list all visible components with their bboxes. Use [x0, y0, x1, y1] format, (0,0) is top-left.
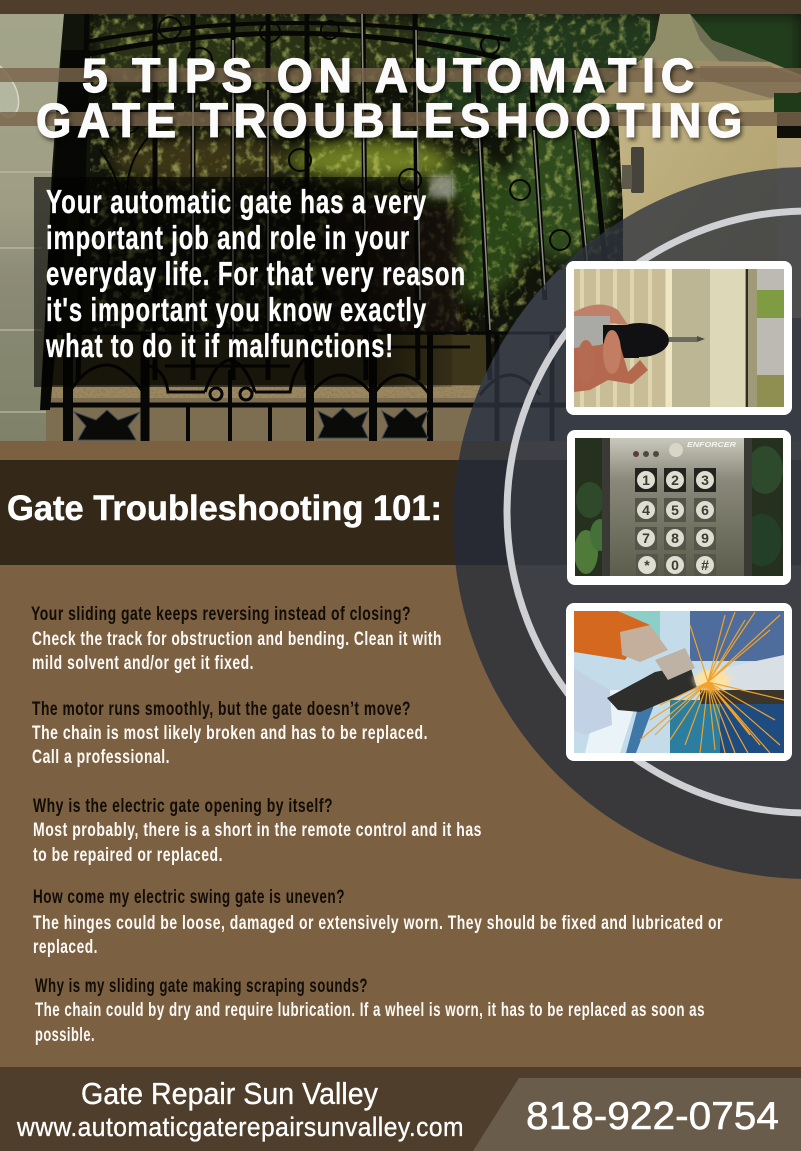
- troubleshooting tips: [31, 604, 723, 1046]
- tip 4: [33, 887, 723, 958]
- large dark circle, opaque part: [453, 441, 801, 879]
- tip 1: [31, 604, 442, 674]
- band seen inside ring: [500, 460, 801, 565]
- title: 5 TIPS ON AUTOMATIC: [82, 50, 700, 103]
- tip 2: [32, 699, 428, 768]
- intro text: what to do it if malfunctions!: [45, 327, 394, 364]
- heading: Gate Troubleshooting 101: Gate Troubleshooting 101:: [7, 489, 442, 528]
- footer phone panel: [473, 1078, 801, 1151]
- gate ironwork: [40, 14, 606, 441]
- intro text: it's important you know exactly: [46, 291, 427, 328]
- left stone pillar: [0, 14, 64, 441]
- top bar: [0, 0, 801, 14]
- photo card: keypad: #: [701, 557, 709, 573]
- tip 4: replaced.: [33, 937, 98, 958]
- translucent stripes behind title: [0, 68, 801, 126]
- tip 1: Your sliding gate keeps reversing instead of closing?: [31, 604, 411, 625]
- photo card: grinder and sparks: [566, 603, 792, 761]
- tip 2: The motor runs smoothly, but the gate doesn’t move?: [32, 699, 411, 720]
- photo card: keypad: 0: [671, 557, 679, 573]
- band seen through circle: [453, 460, 508, 565]
- photo card: keypad: 7: [642, 530, 650, 546]
- tip 3: Why is the electric gate opening by itself?: [33, 796, 333, 817]
- header band: [0, 460, 801, 565]
- right stone pillar: [590, 14, 801, 318]
- tip 3: Most probably, there is a short in the remote control and it has: [33, 820, 482, 841]
- intro text: Your automatic gate has a very: [46, 183, 427, 220]
- tip 2: Call a professional.: [32, 747, 170, 768]
- large dark circle, translucent part over photo: [462, 167, 801, 441]
- title: GATE TROUBLESHOOTING: [36, 95, 748, 148]
- tip 4: How come my electric swing gate is uneven?: [33, 887, 345, 908]
- photo card: drill: [566, 261, 792, 415]
- white ring: [507, 211, 801, 813]
- photo card: keypad: 9: [701, 530, 709, 546]
- tip 3: [33, 796, 482, 866]
- photo card: keypad: ENFORCER: [687, 440, 737, 449]
- photo card: keypad: [567, 430, 791, 585]
- dark overlay behind intro text: [34, 177, 452, 387]
- photo card: keypad: 4: [642, 502, 650, 518]
- title: [36, 50, 748, 148]
- gate rosettes: [74, 408, 428, 440]
- hero photo: iron gate between stone pillars: [0, 14, 801, 441]
- tip 5: [35, 976, 705, 1046]
- photo card: keypad: 5: [671, 502, 679, 518]
- photo card: keypad: 2: [671, 472, 679, 488]
- photo card: keypad: 3: [701, 472, 709, 488]
- intro text: everyday life. For that very reason: [46, 255, 466, 292]
- tip 1: Check the track for obstruction and bending. Clean it with: [32, 629, 442, 650]
- footer: [0, 1067, 801, 1151]
- tip 2: The chain is most likely broken and has to be replaced.: [32, 723, 428, 744]
- intro text: important job and role in your: [46, 219, 410, 256]
- photo card: keypad: 6: [701, 502, 709, 518]
- website: www.automaticgaterepairsunvalley.com: [16, 1112, 464, 1142]
- intro text: [45, 183, 466, 364]
- tip 1: mild solvent and/or get it fixed.: [32, 653, 254, 674]
- photo card: keypad: *: [644, 557, 650, 573]
- company name: Gate Repair Sun Valley: [81, 1076, 378, 1111]
- photo card: keypad: 8: [671, 530, 679, 546]
- phone number: 818-922-0754: [526, 1095, 779, 1138]
- stone wall behind the dark circle: [440, 270, 801, 441]
- tip 5: possible.: [35, 1025, 95, 1046]
- tip 3: to be repaired or replaced.: [33, 845, 223, 866]
- tip 5: Why is my sliding gate making scraping sounds?: [35, 976, 368, 997]
- gravel ground: [46, 335, 486, 441]
- photo card: keypad: 1: [642, 472, 650, 488]
